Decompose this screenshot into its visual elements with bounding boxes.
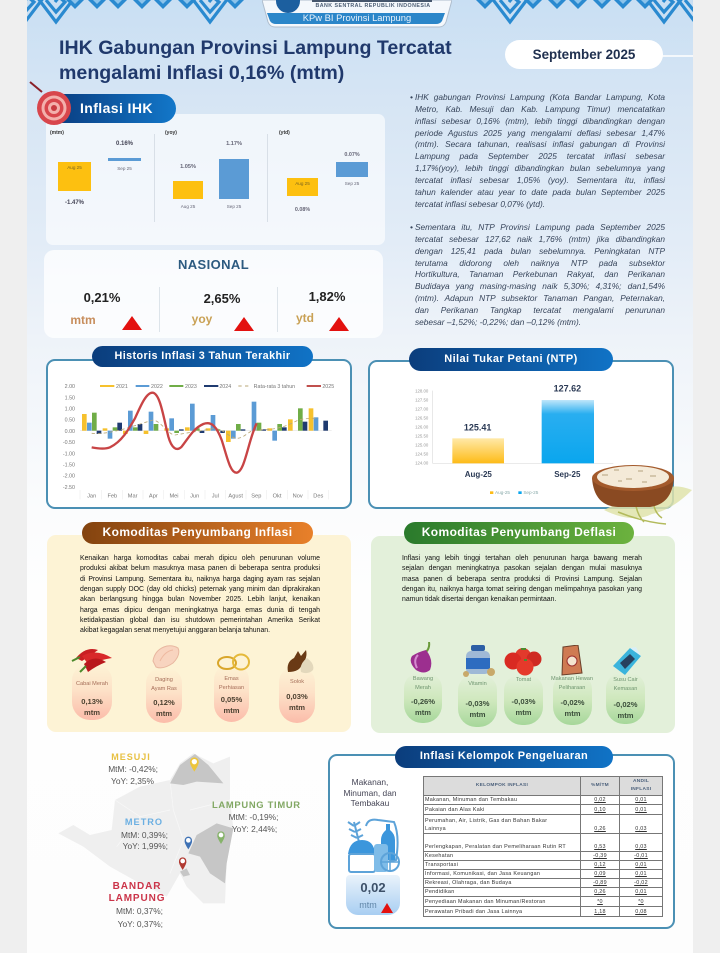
table: kelompok inflasi: -0,89 [593, 880, 607, 886]
text block: ringkasan NTP: terutama didorong oleh naiknya NTP pada subsektor [415, 258, 665, 268]
table: kelompok inflasi: 0,08 [635, 909, 647, 915]
bar chart: ytd: 0.08% [295, 207, 310, 213]
heading: historis inflasi [92, 346, 313, 367]
table: kelompok inflasi: Makanan, Minuman dan Tembakau [425, 797, 517, 803]
table: kelompok inflasi: Perawatan Pribadi dan Jasa Lainnya [425, 909, 522, 915]
text block: ringkasan IHK: Lampung pada September 2025 tercatat inflasi sebesar [415, 151, 665, 161]
card: emas perhiasan: Emas [224, 676, 239, 682]
bar chart: mtm: Aug 25 [67, 165, 82, 170]
line and bar chart: historis: Agust [228, 494, 243, 500]
line and bar chart: historis: 1.50 [65, 395, 75, 401]
line and bar chart: historis: Mar [128, 494, 138, 500]
bar chart: ytd: Sep 25 [345, 181, 359, 186]
stat: yoy: 2,65% [204, 291, 240, 306]
bar chart: NTP: 128.00 [415, 388, 429, 393]
heading: nasional: NASIONAL [178, 257, 249, 272]
line and bar chart: historis: Rata-rata 3 tahun [254, 384, 295, 390]
card: cabai merah: mtm [84, 708, 100, 716]
card: emas perhiasan: 0,05% [221, 695, 242, 704]
label: Bandar Lampung: BANDAR [113, 881, 161, 892]
line and bar chart: historis: -0.50 [63, 440, 75, 446]
label: Bandar Lampung: MtM: 0,37%; [116, 906, 163, 916]
text block: ringkasan IHK: (mtm). Secara tahunan, realisasi inflasi gabungan di Provinsi [415, 139, 665, 149]
card: vitamin: Vitamin [468, 681, 487, 687]
panel: NTP [368, 360, 674, 509]
table: kelompok inflasi: 0,10 [594, 807, 606, 813]
table: kelompok inflasi: *0 [597, 899, 603, 905]
card: susu cair kemasan: Susu Cair [613, 677, 638, 683]
heading: komoditas deflasi [404, 522, 634, 544]
table: kelompok inflasi [423, 776, 663, 917]
card: daging ayam ras: mtm [156, 708, 172, 718]
text: Makanan, Minuman, dan Tembakau: Minuman, dan [343, 788, 397, 798]
card: bawang merah: mtm [415, 708, 431, 716]
card: tomat: -0,03% [511, 697, 536, 706]
card: makanan hewan peliharaan: -0,02% [560, 698, 585, 707]
card: susu cair kemasan [606, 647, 645, 724]
card: cabai merah: 0,13% [81, 697, 103, 706]
card: makanan hewan peliharaan: Peliharaan [559, 685, 585, 691]
text: Makanan, Minuman, dan Tembakau: Makanan, [352, 777, 388, 787]
text block: ringkasan IHK [410, 92, 666, 208]
bar chart: yoy [154, 130, 249, 222]
card: vitamin: mtm [469, 710, 486, 718]
table: kelompok inflasi: 0,01 [635, 797, 647, 803]
line and bar chart: historis: 2023 [185, 384, 197, 390]
text block: ringkasan NTP: Hortikultura, Tanaman Perkebunan Rakyat, dan Perikanan [415, 269, 665, 279]
bar chart: mtm [50, 130, 141, 206]
card: bawang merah: Bawang [413, 676, 433, 682]
line and bar chart: historis: Feb [107, 494, 117, 500]
text block: deflasi [402, 554, 642, 603]
icon: target [29, 81, 71, 125]
card: daging ayam ras: Ayam Ras [151, 686, 177, 692]
icon: milk carton [613, 647, 641, 675]
text block: inflasi: Kenaikan harga komoditas cabai merah dipicu oleh penurunan volume [80, 555, 320, 562]
stat: mtm: 0,21% [84, 290, 120, 305]
text block: ringkasan NTP: Budidaya yang masing-masing naik 5,30%; 4,31%; dan1,54% [415, 281, 665, 291]
bar chart: yoy: (yoy) [165, 130, 177, 136]
heading: Inflasi IHK [58, 94, 176, 123]
text block: deflasi: sejalan dengan meningkatnya pasokan sejalan dengan mulai masuknya [402, 565, 642, 572]
stat: ytd [296, 289, 349, 331]
panel: nasional [44, 250, 383, 338]
line and bar chart: historis: Des [313, 494, 324, 500]
heading: komoditas deflasi: Komoditas Penyumbang Deflasi [422, 525, 616, 539]
bar chart: mtm: Sep 25 [117, 166, 132, 171]
card: susu cair kemasan: Kemasan [614, 686, 637, 692]
card: sisik [279, 650, 315, 723]
text block: deflasi: Inflasi yang lebih tinggi tertahan oleh penurunan harga bawang merah [402, 555, 642, 562]
text block: ringkasan NTP: dengan 125,41 pada bulan sebelumnya. Peningkatan NTP [415, 246, 665, 256]
card: tomat: Tomat [516, 677, 531, 683]
table: kelompok inflasi: 0,26 [594, 889, 606, 895]
text block: ringkasan NTP: (mtm). Adapun NTP subsektor Tanaman Pangan, Peternakan, [415, 293, 665, 303]
bar chart: NTP: 125.50 [415, 433, 429, 438]
stat: yoy: yoy [192, 312, 212, 326]
table: kelompok inflasi: Kesehatan [425, 853, 453, 859]
line and bar chart: historis: -2.00 [63, 474, 75, 480]
label: Bandar Lampung [105, 881, 165, 930]
panel: inflasi kelompok pengeluaran [328, 754, 675, 929]
bar chart: ytd [267, 130, 368, 222]
card: emas perhiasan [214, 654, 250, 722]
text block: deflasi: namun tidak disertai dengan kenaikan permintaan. [402, 596, 556, 603]
table: kelompok inflasi: ANDIL [633, 779, 649, 784]
panel: historis inflasi [46, 359, 352, 509]
table: kelompok inflasi: KELOMPOK INFLASI [476, 783, 528, 788]
table: kelompok inflasi: %M/TM [591, 783, 609, 788]
bar chart: NTP: 127.50 [415, 397, 429, 402]
table: kelompok inflasi: Pakaian dan Alas Kaki [425, 807, 485, 813]
date badge: September 2025 [533, 47, 635, 62]
line and bar chart: historis: 2022 [151, 384, 163, 390]
label: Mesuji: MESUJI [111, 752, 151, 762]
bar chart: NTP: Sep-25 [523, 490, 539, 495]
card: bawang merah: Merah [415, 685, 431, 691]
line and bar chart: historis [63, 384, 334, 500]
line and bar chart: historis: Jul [212, 494, 219, 500]
icon: chicken [152, 645, 180, 668]
bar chart: ytd: 0.07% [344, 152, 360, 158]
table: kelompok inflasi: INFLASI [631, 787, 651, 792]
bar chart: NTP: 126.50 [415, 415, 429, 420]
heading: komoditas inflasi [82, 522, 313, 544]
bar chart: NTP: Aug-25 [465, 470, 492, 479]
text block: inflasi: harga emas dipicu dengan meningkatnya harga emas dunia di tengah [80, 607, 320, 614]
stat pill: 0,02 mtm [346, 875, 400, 915]
card: bawang merah [404, 642, 442, 723]
text block: ringkasan IHK: tahun kalender atau year to date pada bulan September 2025 [415, 187, 665, 197]
line and bar chart: historis: Apr [149, 494, 158, 500]
table: kelompok inflasi: 0,02 [594, 797, 606, 803]
table: kelompok inflasi: Perumahan, Air, Listrik, Gas dan Bahan Bakar [425, 818, 547, 824]
bar chart: yoy: Aug 25 [181, 204, 195, 209]
table: kelompok inflasi: 0,09 [594, 871, 606, 877]
bar chart: NTP: Sep-25 [554, 470, 581, 479]
card: susu cair kemasan: -0,02% [613, 700, 638, 709]
heading: kelompok pengeluaran [395, 746, 613, 768]
bar chart: NTP: 124.00 [415, 460, 429, 465]
label: Lampung Timur: MtM: -0,19%; [229, 812, 278, 822]
bar chart: yoy: Sep 25 [227, 204, 241, 209]
table: kelompok inflasi: -0,39 [593, 853, 607, 859]
table: kelompok inflasi: 1,18 [594, 909, 606, 915]
icon: spice [288, 650, 314, 673]
label: Metro: MtM: 0,39%; [121, 830, 168, 840]
line and bar chart: historis: Nov [293, 494, 303, 500]
text block: ringkasan NTP: • [410, 222, 413, 232]
text block: ringkasan NTP: dan Perikanan Tangkap tercatat mengalami penurunan [415, 305, 665, 315]
bar chart: NTP: 125.41 [464, 423, 491, 433]
text block: ringkasan IHK: tercatat inflasi sebesar 0,07% (ytd). [415, 198, 545, 208]
icon: chili [72, 649, 112, 673]
map: Provinsi Lampung [58, 754, 234, 904]
line and bar chart: historis: 0.50 [65, 418, 75, 424]
card: emas perhiasan: mtm [223, 706, 240, 714]
card: makanan hewan peliharaan [551, 645, 593, 725]
line and bar chart: historis: Jan [87, 494, 96, 500]
label: Bandar Lampung: YoY: 0,37%; [118, 919, 163, 929]
text block: ringkasan IHK: • [410, 92, 413, 102]
bar chart: NTP: 125.00 [415, 442, 429, 447]
text: Makanan, Minuman, dan Tembakau [330, 777, 410, 809]
card: vitamin [458, 645, 497, 727]
table: kelompok inflasi: 0,01 [635, 871, 647, 877]
bar chart: mtm: 0.16% [116, 141, 133, 147]
card: sisik: 0,03% [286, 692, 308, 701]
text block: ringkasan IHK: periode Agustus 2025 yang mengalami deflasi sebesar 1,47% [415, 128, 665, 138]
table: kelompok inflasi: Rekreasi, Olahraga, dan Budaya [425, 880, 512, 886]
bar chart: yoy: 1.17% [226, 141, 242, 147]
card: tomat [504, 648, 543, 725]
table: kelompok inflasi: Lainnya [425, 826, 446, 832]
table: kelompok inflasi: Perlengkapan, Peralatan dan Pemeliharaan Rutin RT [425, 844, 566, 850]
heading: komoditas inflasi: Komoditas Penyumbang Inflasi [103, 525, 292, 539]
text block: inflasi: akibat kegagalan senat menyetujui anggaran belanja tahunan. [80, 627, 270, 634]
label: Mesuji [108, 752, 158, 786]
title: IHK Gabungan Provinsi Lampung Tercatat [59, 37, 452, 59]
icon: rice bowl [592, 465, 692, 525]
table: kelompok inflasi: Informasi, Komunikasi, dan Jasa Keuangan [425, 871, 540, 877]
card: daging ayam ras: Daging [155, 677, 173, 683]
panel: Inflasi IHK charts [46, 114, 385, 245]
table: kelompok inflasi: 0,03 [635, 844, 647, 850]
card: emas perhiasan: Perhiasan [219, 685, 244, 691]
label: Metro: YoY: 1,99%; [123, 841, 168, 851]
label: Mesuji: MtM: -0,42%; [108, 764, 158, 774]
bar chart: ytd: (ytd) [279, 130, 290, 136]
stat pill: 0,02 mtm: mtm [359, 900, 377, 910]
line and bar chart: historis: -1.50 [63, 463, 75, 469]
text block: ringkasan IHK: Metro, Kab. Mesuji dan Kab. Lampung Timur) mencatatkan [415, 104, 665, 114]
line and bar chart: historis: -1.00 [63, 451, 75, 457]
text block: inflasi: di Provinsi Lampung. Sementara itu, naiknya harga daging ayam ras sejalan [80, 576, 320, 583]
text block: ringkasan IHK: IHK gabungan Provinsi Lampung (Kota Bandar Lampung, Kota [415, 92, 665, 102]
text block: inflasi: ketidakpastian global dan isu shutdown pemerintahan Amerika Serikat [80, 617, 320, 624]
title: mengalami Inflasi 0,16% (mtm) [59, 62, 344, 84]
bar chart: ytd: Aug 25 [295, 181, 310, 186]
card: tomat: mtm [515, 708, 532, 716]
heading: NTP [409, 348, 613, 371]
label: Metro: METRO [125, 817, 163, 827]
table: kelompok inflasi: Transportasi [425, 862, 458, 868]
card: daging ayam ras: 0,12% [153, 698, 175, 707]
line and bar chart: historis: Jun [190, 494, 199, 500]
heading: NTP: Nilai Tukar Petani (NTP) [444, 353, 578, 365]
line and bar chart: historis: -2.50 [63, 485, 75, 491]
card: cabai merah: Cabai Merah [76, 681, 108, 687]
text block: inflasi: dengan supply DOC (day old chicks) peternak yang minim dan diprakirakan [80, 586, 320, 593]
bar chart: mtm: (mtm) [50, 130, 64, 136]
label: Mesuji: YoY: 2,35% [111, 776, 154, 786]
text block: ringkasan IHK: inflasi sebesar 0,16% (mtm), lebih tinggi dibandingkan dengan [415, 116, 665, 126]
text block: ringkasan NTP [410, 222, 666, 327]
heading: historis inflasi: Historis Inflasi 3 Tahun Terakhir [114, 350, 290, 362]
line and bar chart: historis: Mei [169, 494, 179, 500]
line and bar chart: historis: 2025 [322, 384, 334, 390]
header ornament [27, 0, 693, 24]
label: Lampung Timur: YoY: 2,44%; [232, 824, 277, 834]
table: kelompok inflasi: 0,01 [635, 862, 647, 868]
text block: ringkasan NTP: sebesar –1,52%; -0,22%; dan –0,12% (mtm). [415, 317, 581, 327]
heading: kelompok pengeluaran: Inflasi Kelompok Pengeluaran [420, 750, 588, 762]
icon: gold rings [217, 654, 250, 670]
table: kelompok inflasi: -0,01 [634, 853, 648, 859]
label: Metro [121, 817, 168, 851]
heading: Inflasi IHK: Inflasi IHK [80, 100, 153, 116]
text block: ringkasan IHK: 1,17%(yoy), lebih tinggi dibandingkan bulan sebelumnya yang [415, 163, 665, 173]
text block: inflasi: akan berlangsung hingga bulan November 2025. Lebih lanjut, kenaikan [80, 596, 320, 603]
line and bar chart: historis: 0.00 [65, 429, 75, 435]
bar chart: NTP: Aug-25 [495, 490, 510, 495]
panel: komoditas deflasi [371, 536, 675, 733]
label: Bandar Lampung: LAMPUNG [109, 893, 165, 904]
card: susu cair kemasan: mtm [617, 710, 634, 720]
text block: deflasi: dengan itu, naiknya harga tomat seiring dengan melimpahnya pasokan yang [402, 586, 642, 593]
stat pill: 0,02 mtm: 0,02 [360, 880, 386, 895]
stat: mtm [70, 290, 142, 330]
stat: yoy [192, 291, 254, 331]
table: kelompok inflasi: *0 [638, 899, 644, 905]
label: Lampung Timur: LAMPUNG TIMUR [212, 799, 301, 810]
card: cabai merah [72, 649, 112, 720]
stat: mtm: mtm [70, 313, 96, 327]
table: kelompok inflasi: 0,53 [594, 844, 606, 850]
text block: inflasi: produksi akibat belum masuknya masa panen di beberapa sentra produksi [80, 565, 320, 572]
text: Makanan, Minuman, dan Tembakau: Tembakau [351, 798, 389, 808]
bar chart: NTP: 126.00 [415, 424, 429, 429]
text block: ringkasan NTP: tercatat sebesar 127,62 naik 1,76% (mtm) jika dibandingkan [415, 234, 665, 244]
table: kelompok inflasi: 0,12 [594, 862, 606, 868]
bar chart: mtm: -1.47% [65, 200, 84, 206]
line and bar chart: historis: 2.00 [65, 384, 75, 390]
bar chart: NTP [415, 383, 614, 495]
table: kelompok inflasi: 0,03 [635, 826, 647, 832]
icon: pet food bag [562, 645, 583, 676]
text block: inflasi [80, 554, 320, 634]
table: kelompok inflasi: -0,02 [634, 880, 648, 886]
card: bawang merah: -0,26% [411, 697, 435, 706]
panel: komoditas inflasi [47, 535, 351, 732]
bar chart: NTP: 127.62 [554, 383, 581, 393]
title [59, 37, 452, 84]
line and bar chart: historis: Okt [273, 494, 282, 500]
label: Lampung Timur [212, 799, 301, 834]
table: kelompok inflasi: Pendidikan [425, 889, 454, 895]
card: makanan hewan peliharaan: Makanan Hewan [551, 676, 593, 682]
card: vitamin: -0,03% [465, 699, 490, 708]
bar chart: NTP: 124.50 [415, 451, 429, 456]
card: sisik: mtm [289, 702, 305, 712]
stat: ytd: 1,82% [309, 289, 345, 304]
card: daging ayam ras [146, 645, 182, 723]
icon: makanan [346, 816, 400, 874]
table: kelompok inflasi: 0,01 [635, 807, 647, 813]
text block: deflasi: masa panen di beberapa sentra produksi di Provinsi Lampung. Sejalan [402, 576, 642, 583]
icon: onion [410, 642, 432, 672]
logo badge: BANK SENTRAL REPUBLIK INDONESIA [315, 3, 431, 9]
line and bar chart: historis: 2021 [116, 384, 128, 390]
bar chart: yoy: 1.05% [180, 164, 196, 170]
table: kelompok inflasi: 0,01 [635, 889, 647, 895]
text block: ringkasan IHK: tercatat inflasi sebesar 1,05% (yoy). Sementara itu, inflasi [415, 175, 665, 185]
line and bar chart: historis: 1.00 [65, 406, 75, 412]
icon: vitamin bottle [463, 645, 495, 677]
line and bar chart: historis: 2024 [219, 384, 231, 390]
table: kelompok inflasi: 0,26 [594, 826, 606, 832]
card: makanan hewan peliharaan: mtm [564, 708, 581, 718]
logo badge: KPw BI Provinsi Lampung [303, 12, 411, 23]
line and bar chart: historis: Sep [251, 494, 261, 500]
text block: ringkasan NTP: Sementara itu, NTP Provinsi Lampung pada September 2025 [415, 222, 665, 232]
stat: ytd: ytd [296, 311, 314, 325]
table: kelompok inflasi: Penyediaan Makanan dan Minuman/Restoran [425, 899, 546, 905]
card: sisik: Solok [290, 679, 304, 685]
icon: tomato [504, 648, 542, 676]
logo badge [262, 0, 452, 28]
bar chart: NTP: 127.00 [415, 406, 429, 411]
